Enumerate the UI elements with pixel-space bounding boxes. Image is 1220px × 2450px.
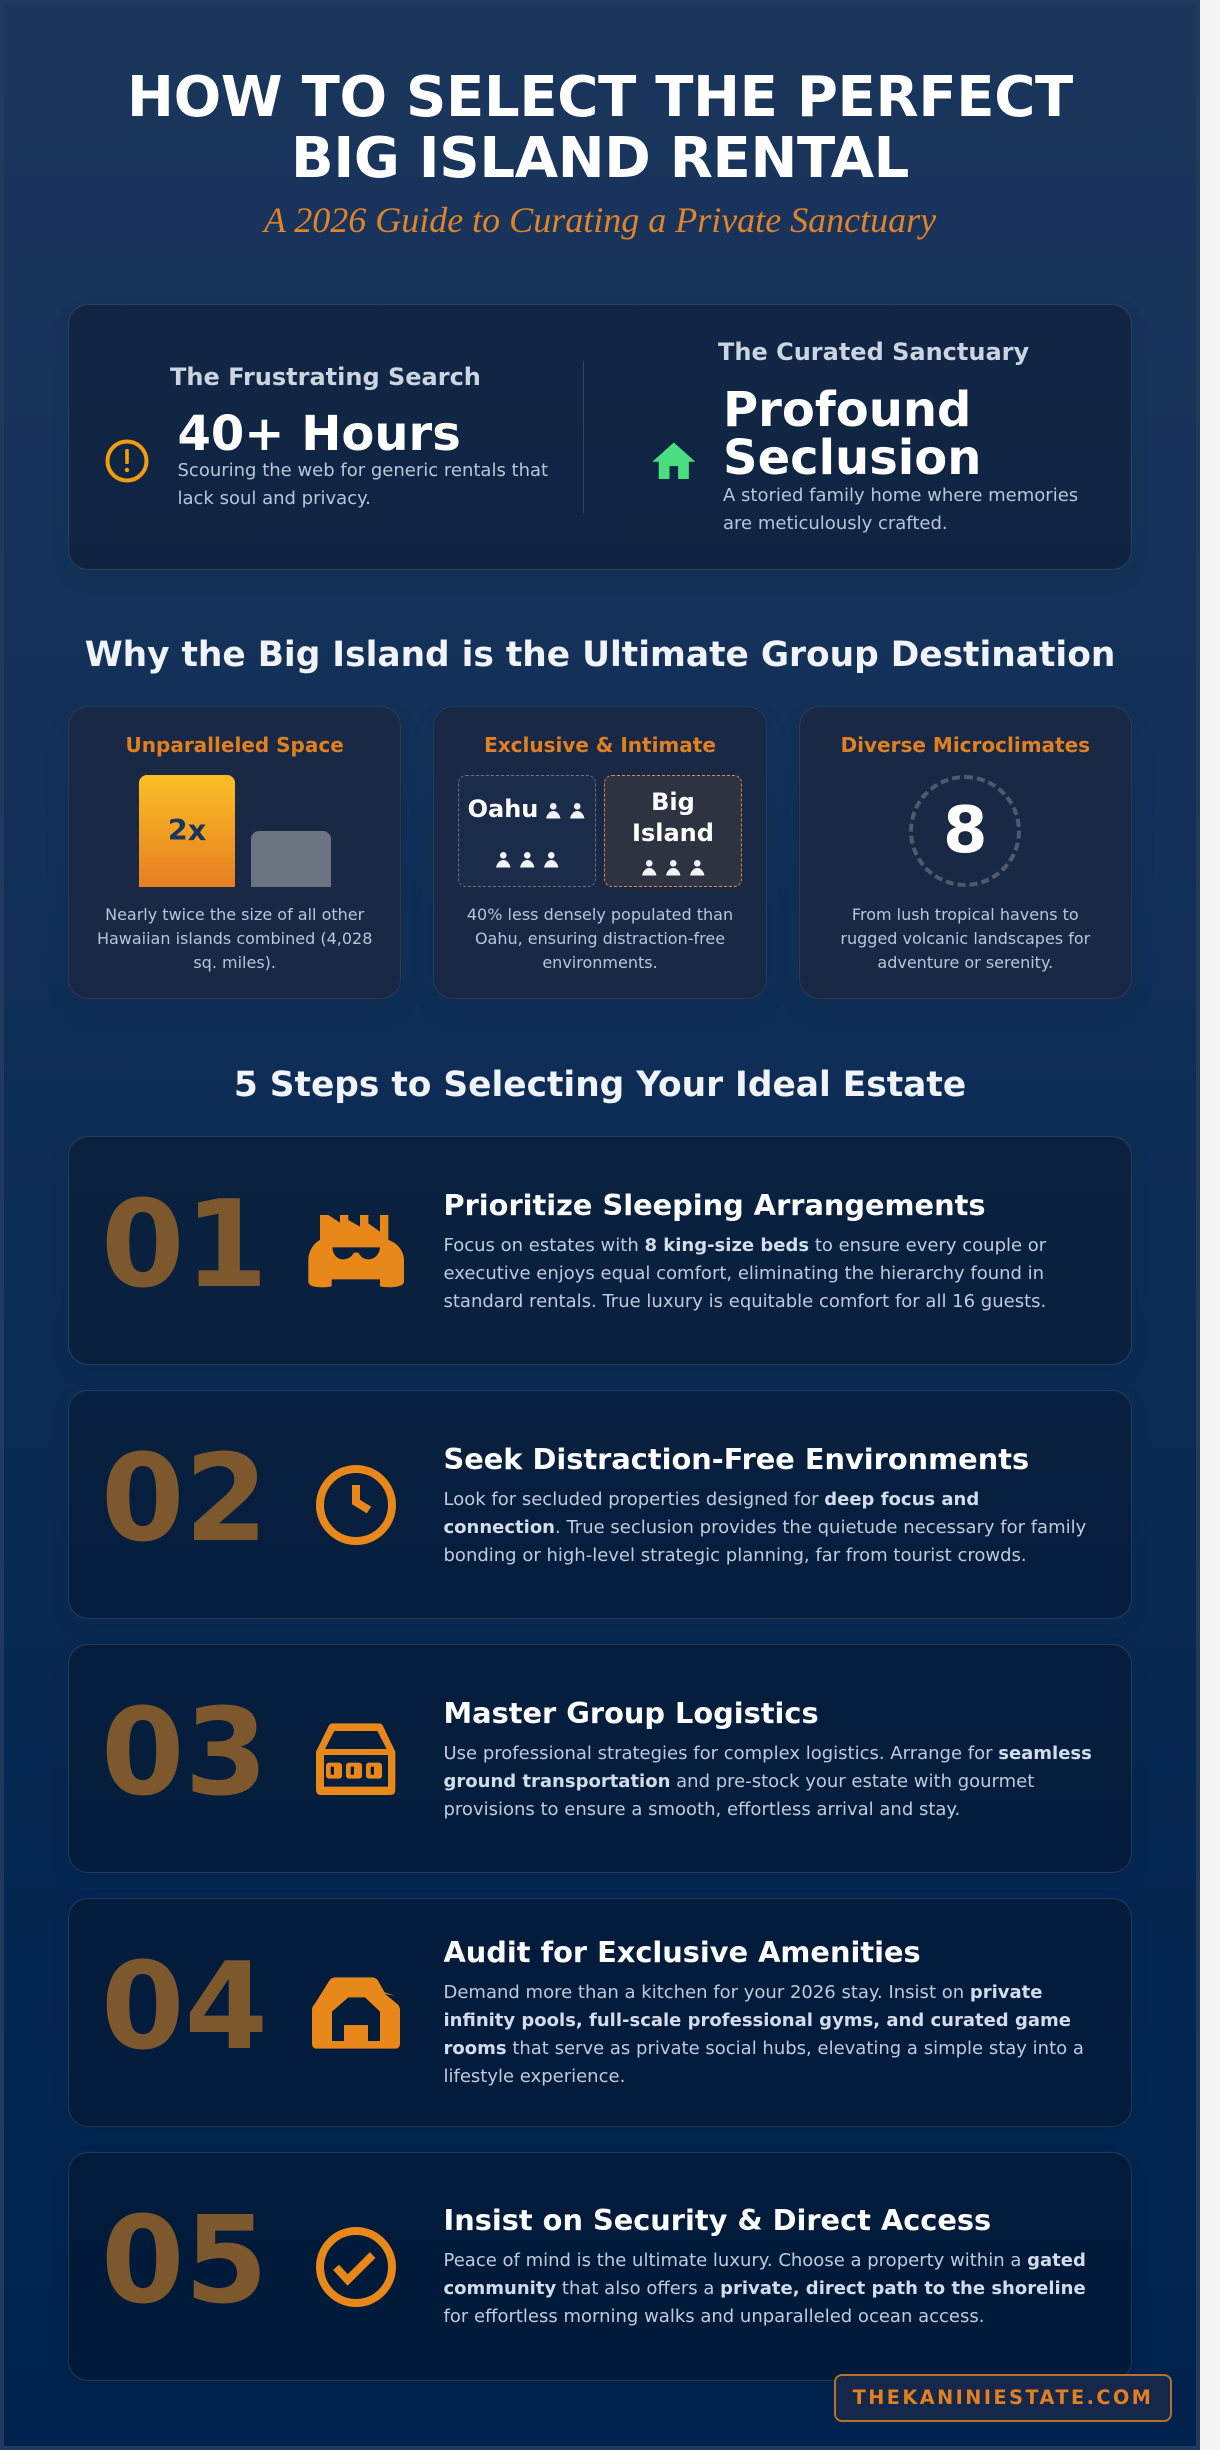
step description: standard rentals. True luxury is equitable comfort for all 16 guests. xyxy=(444,1291,1046,1312)
panel: step 4 xyxy=(68,1898,1132,2127)
text: sanctuary description: A storied family home where memories xyxy=(723,485,1078,506)
bar chart: size comparison xyxy=(139,775,331,887)
dashed circle with number 8: 8 xyxy=(943,794,988,868)
density box: big island xyxy=(604,775,742,887)
panel: step 5 xyxy=(68,2152,1132,2381)
icon: three people xyxy=(642,860,704,876)
step description: rooms that serve as private social hubs, elevating a simple stay into a xyxy=(444,2038,1084,2059)
card title: Diverse Microclimates xyxy=(841,733,1090,757)
card description xyxy=(467,904,733,972)
card title: Unparalleled Space xyxy=(126,733,344,757)
card description: environments. xyxy=(542,952,658,972)
stat: profound seclusion: Profound xyxy=(723,382,971,438)
title: BIG ISLAND RENTAL xyxy=(291,126,909,191)
step title: Audit for Exclusive Amenities xyxy=(444,1935,921,1969)
step description xyxy=(444,1235,1046,1312)
text: search description: Scouring the web for generic rentals that xyxy=(178,460,548,481)
panel: step 3 xyxy=(68,1644,1132,1873)
card description xyxy=(840,904,1090,972)
icon: house xyxy=(312,1977,400,2049)
card description: Nearly twice the size of all other xyxy=(105,904,364,924)
step description: Use professional strategies for complex logistics. Arrange for seamless xyxy=(444,1743,1092,1764)
label: oahu: Oahu xyxy=(468,795,538,823)
icon: three people xyxy=(496,852,558,868)
step description: lifestyle experience. xyxy=(444,2066,625,2087)
step description xyxy=(444,2250,1086,2327)
step title: Prioritize Sleeping Arrangements xyxy=(444,1188,986,1222)
label: big island: Big xyxy=(651,788,695,816)
step title: Seek Distraction-Free Environments xyxy=(444,1442,1029,1476)
text: search description xyxy=(178,460,548,509)
dashed circle with number 8 xyxy=(909,775,1021,887)
panel: step 1 xyxy=(68,1136,1132,1365)
step description: bonding or high-level strategic planning, far from tourist crowds. xyxy=(444,1545,1027,1566)
step number: 01 xyxy=(101,1176,268,1315)
card title: Exclusive & Intimate xyxy=(484,733,716,757)
label: big island xyxy=(632,788,714,846)
card description: 40% less densely populated than xyxy=(467,904,733,924)
step description: community that also offers a private, direct path to the shoreline xyxy=(444,2278,1086,2299)
icon: check circle xyxy=(316,2227,396,2307)
step number: 04 xyxy=(101,1938,268,2077)
icon: alert circle xyxy=(106,440,148,482)
step description: ground transportation and pre-stock your estate with gourmet xyxy=(444,1771,1034,1792)
title: HOW TO SELECT THE PERFECT xyxy=(127,65,1073,130)
card description xyxy=(97,904,372,972)
icon: home xyxy=(652,442,696,479)
card description: From lush tropical havens to xyxy=(852,904,1079,924)
heading: why the big island: Why the Big Island is the Ultimate Group Destination xyxy=(85,634,1115,674)
text: sanctuary description: are meticulously crafted. xyxy=(723,513,948,534)
icon: bed xyxy=(308,1215,404,1288)
card description: Hawaiian islands combined (4,028 xyxy=(97,928,372,948)
step number: 05 xyxy=(101,2192,268,2331)
step description xyxy=(444,1489,1086,1566)
card description: adventure or serenity. xyxy=(877,952,1053,972)
panel: diverse microclimates xyxy=(799,706,1132,999)
icon: two people xyxy=(546,803,584,818)
step title: Insist on Security & Direct Access xyxy=(444,2203,991,2237)
step description: for effortless morning walks and unparalleled ocean access. xyxy=(444,2306,984,2327)
panel: unparalleled space xyxy=(68,706,401,999)
step description: infinity pools, full-scale professional gyms, and curated game xyxy=(444,2010,1071,2031)
step description: provisions to ensure a smooth, effortless arrival and stay. xyxy=(444,1799,960,1820)
text: search description: lack soul and privacy. xyxy=(178,488,371,509)
density box: oahu xyxy=(458,775,596,887)
step description: connection. True seclusion provides the quietude necessary for family xyxy=(444,1517,1086,1538)
subtitle: A 2026 Guide to Curating a Private Sanctuary xyxy=(264,200,936,240)
bar: big island: 2x xyxy=(168,813,206,847)
card description: sq. miles). xyxy=(193,952,276,972)
stat: 40+ hours: 40+ Hours xyxy=(178,406,461,462)
step number: 03 xyxy=(101,1684,268,1823)
label: big island: Island xyxy=(632,818,714,846)
step description xyxy=(444,1982,1084,2087)
text: sanctuary description xyxy=(723,485,1078,534)
heading: the curated sanctuary: The Curated Sanctuary xyxy=(718,338,1029,366)
panel: frustrating search vs curated sanctuary xyxy=(68,304,1132,570)
stat: profound seclusion: Seclusion xyxy=(723,430,981,486)
heading: 5 steps: 5 Steps to Selecting Your Ideal Estate xyxy=(234,1064,966,1104)
step description: Focus on estates with 8 king-size beds to ensure every couple or xyxy=(444,1235,1046,1256)
step number: 02 xyxy=(101,1430,268,1569)
step description: Look for secluded properties designed for deep focus and xyxy=(444,1489,979,1510)
icon: clock xyxy=(316,1465,396,1545)
divider xyxy=(583,361,584,513)
step description: Peace of mind is the ultimate luxury. Choose a property within a gated xyxy=(444,2250,1086,2271)
heading: the frustrating search: The Frustrating Search xyxy=(170,363,481,391)
step description: executive enjoys equal comfort, eliminating the hierarchy found in xyxy=(444,1263,1044,1284)
footer badge: website xyxy=(834,2374,1172,2422)
title xyxy=(127,65,1073,191)
step description: Demand more than a kitchen for your 2026 stay. Insist on private xyxy=(444,1982,1042,2003)
icon: storage box xyxy=(316,1723,396,1795)
footer badge: website: THEKANINIESTATE.COM xyxy=(853,2386,1153,2409)
stat: profound seclusion xyxy=(723,382,981,486)
step description xyxy=(444,1743,1092,1820)
bar: big island xyxy=(139,775,235,887)
bar: other islands xyxy=(251,831,331,887)
panel: step 2 xyxy=(68,1390,1132,1619)
step title: Master Group Logistics xyxy=(444,1696,819,1730)
panel: exclusive and intimate xyxy=(433,706,767,999)
card description: rugged volcanic landscapes for xyxy=(840,928,1090,948)
card description: Oahu, ensuring distraction-free xyxy=(475,928,725,948)
